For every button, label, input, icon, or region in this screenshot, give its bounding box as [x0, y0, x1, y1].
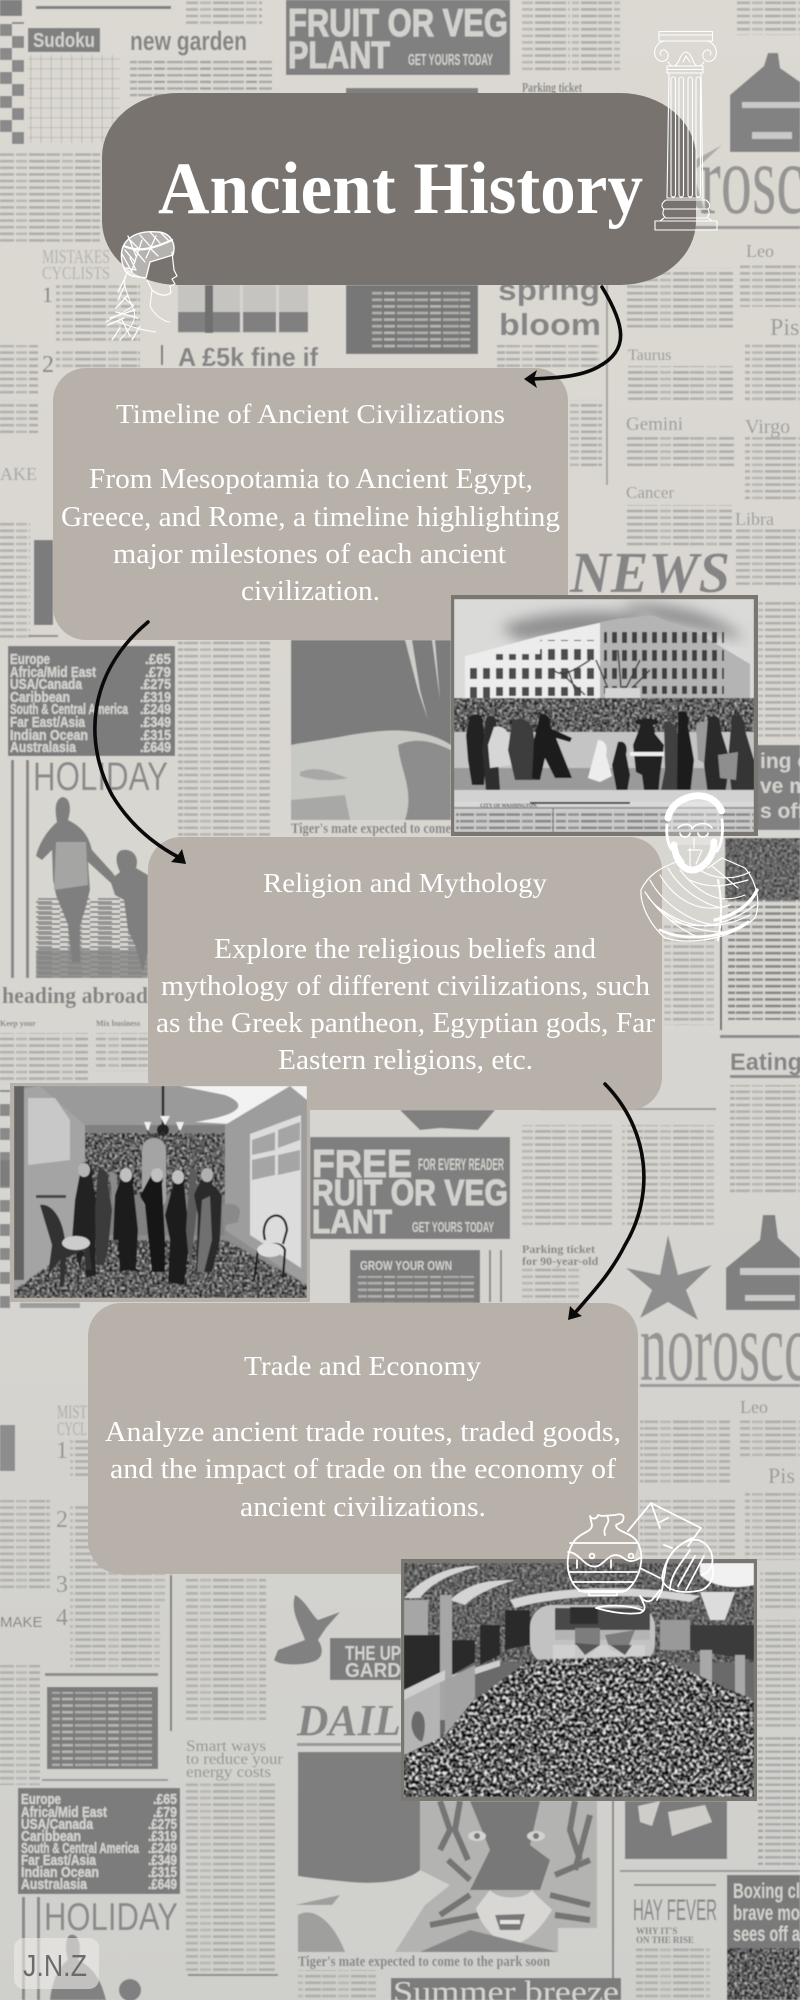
icon: laurel statue head	[106, 232, 177, 340]
rates table two: Indian Ocean	[21, 1865, 99, 1881]
rates table two: Europe	[21, 1792, 61, 1808]
rates table: .£275	[140, 677, 171, 693]
religion body text: as the Greek pantheon, Egyptian gods, Far	[156, 1007, 655, 1039]
rates table two: .£249	[148, 1841, 177, 1857]
rates table two: Caribbean	[21, 1829, 81, 1845]
tiger clipping two	[295, 1752, 621, 2000]
icon: amphora and scroll	[568, 1503, 713, 1614]
rates table: .£79	[145, 665, 171, 681]
rates table two: Far East/Asia	[21, 1853, 97, 1869]
panel: religion	[148, 837, 662, 1110]
upper left and middle clippings: spring	[498, 274, 600, 307]
lower left clippings: MAKE	[0, 1614, 43, 1631]
trade body text: Analyze ancient trade routes, traded goods,	[105, 1416, 621, 1448]
holiday clipping: HOLIDAY	[33, 755, 168, 799]
upper left and middle clippings: bloom	[499, 307, 601, 342]
rates table two: .£79	[153, 1805, 177, 1821]
free fruit or veg clipping: Parking ticket	[522, 1242, 595, 1256]
rates table: Australasia	[10, 740, 77, 756]
rates table: .£349	[140, 715, 171, 731]
lower left clippings: MIST	[57, 1402, 87, 1423]
tiger clipping two: Tiger's mate expected to come to the park soon	[298, 1954, 551, 1970]
upper left and middle clippings: 2	[42, 352, 54, 378]
lower left clippings: 1	[56, 1438, 68, 1464]
lower right horoscope: WHY IT'S	[636, 1926, 677, 1936]
title: Ancient History	[158, 148, 643, 230]
heading abroad clipping	[0, 983, 148, 1310]
free fruit or veg clipping	[310, 1108, 716, 1303]
tiger clipping one: Tiger's mate expected to come	[291, 821, 451, 837]
rates table two: USA/Canada	[21, 1817, 94, 1833]
top clippings: Parking ticket	[522, 81, 582, 96]
lower left clippings: THE UP	[345, 1643, 401, 1665]
holiday clipping	[11, 640, 270, 978]
timeline body text: civilization.	[241, 575, 380, 607]
lower right horoscope: ON THE RISE	[636, 1935, 694, 1945]
heading abroad clipping: Keep your	[0, 1019, 36, 1028]
rates table: USA/Canada	[10, 677, 83, 693]
rates table two: .£349	[148, 1853, 177, 1869]
rates table two: .£319	[148, 1829, 177, 1845]
rates table: .£319	[140, 690, 171, 706]
trade heading: Trade and Economy	[244, 1351, 482, 1381]
religion body text: Eastern religions, etc.	[278, 1044, 533, 1076]
arrow: timeline to religion	[95, 622, 186, 864]
icon: philosopher bust	[641, 796, 758, 941]
tray seller	[633, 722, 664, 797]
lower left clippings: CYCL	[57, 1419, 87, 1440]
upper left and middle clippings: MISTAKES	[42, 246, 110, 268]
photo: street crowd engraving: CITY OF WASHINGTON.	[480, 804, 538, 809]
right horoscope column: Gemini	[626, 414, 683, 435]
free fruit or veg clipping: RUIT OR VEG	[312, 1172, 508, 1213]
lower left clippings	[0, 1402, 401, 1975]
upper left and middle clippings	[0, 88, 800, 485]
top clippings	[0, 0, 800, 144]
free fruit or veg clipping: FREE	[312, 1143, 412, 1186]
trade body text: ancient civilizations.	[240, 1491, 486, 1523]
rates table: Far East/Asia	[10, 715, 86, 731]
photo: interior room engraving	[10, 1083, 310, 1302]
right horoscope column	[0, 400, 800, 1195]
free fruit or veg clipping: FOR EVERY READER	[418, 1155, 504, 1174]
eight standing men	[72, 1162, 98, 1278]
religion body text: mythology of different civilizations, such	[161, 970, 650, 1002]
trade body text	[105, 1416, 621, 1523]
lower left clippings: 2	[56, 1507, 68, 1533]
heading abroad clipping: heading abroad	[2, 983, 148, 1008]
rates table two: South & Central America	[21, 1841, 140, 1857]
star and house illustration	[646, 53, 800, 235]
rates table two: Africa/Mid East	[21, 1805, 107, 1821]
upper left and middle clippings: CYCLISTS	[42, 263, 110, 283]
timeline heading: Timeline of Ancient Civilizations	[116, 399, 505, 429]
rates table: Europe	[10, 652, 50, 668]
top clippings: FRUIT OR VEG	[288, 2, 508, 45]
rates table	[8, 646, 175, 756]
panel: trade	[88, 1303, 638, 1574]
lower right horoscope: Pis	[768, 1463, 795, 1488]
upper left and middle clippings: 1	[42, 282, 53, 307]
chairs	[40, 1205, 92, 1285]
timeline body text	[61, 463, 560, 607]
right group	[660, 720, 679, 790]
panel: timeline	[53, 368, 568, 640]
trade body text: and the impact of trade on the economy of	[110, 1453, 616, 1485]
free fruit or veg clipping: GROW YOUR OWN	[360, 1258, 452, 1273]
free fruit or veg clipping: GET YOURS TODAY	[412, 1219, 494, 1236]
rates table: Caribbean	[10, 690, 70, 706]
arrow: religion to trade	[568, 1084, 644, 1320]
upper left and middle clippings: A £5k fine if	[178, 342, 318, 372]
rates table two: .£315	[148, 1865, 177, 1881]
lower left clippings: 4	[56, 1605, 68, 1631]
timeline body text: Greece, and Rome, a timeline highlighting	[61, 501, 560, 533]
rates table: Indian Ocean	[10, 728, 88, 744]
right horoscope column: Libra	[735, 509, 774, 529]
religion body text	[156, 933, 655, 1076]
rates table two: .£649	[148, 1877, 177, 1893]
tiger clipping one	[291, 640, 451, 837]
rates table two: .£275	[148, 1817, 177, 1833]
free fruit or veg clipping: for 90-year-old	[522, 1254, 599, 1268]
second star, house and horoscope	[626, 1215, 800, 1402]
icon: ionic column	[655, 32, 717, 230]
right horoscope column: AKE	[0, 464, 37, 484]
right horoscope column: Cancer	[626, 483, 674, 502]
right horoscope column: Virgo	[745, 416, 790, 438]
free fruit or veg clipping: LANT	[312, 1203, 392, 1240]
upper left and middle clippings: Pis	[770, 315, 799, 341]
rates table: Africa/Mid East	[10, 665, 96, 681]
photo: ballroom crowd	[401, 1559, 757, 1801]
rates table two	[18, 1788, 376, 2000]
rates table two: .£65	[153, 1792, 177, 1808]
lower left clippings: to reduce your	[186, 1751, 284, 1768]
religion body text: Explore the religious beliefs and	[214, 933, 597, 965]
lower left clippings: 3	[56, 1572, 68, 1598]
upper left and middle clippings: Leo	[746, 241, 774, 261]
watermark: J.N.Z	[23, 1948, 87, 1983]
rates table two: HOLIDAY	[44, 1896, 178, 1939]
lower right horoscope: HAY FEVER	[633, 1894, 717, 1927]
rates table two: Australasia	[21, 1877, 88, 1893]
top clippings: PLANT	[288, 35, 390, 77]
heading abroad clipping: Mix business	[96, 1019, 140, 1028]
lower left clippings: DAIL	[296, 1696, 401, 1745]
rates table: .£315	[140, 728, 171, 744]
lower left clippings: GARD	[345, 1660, 401, 1682]
rates table: South & Central America	[10, 702, 129, 718]
right horoscope column: NEWS	[569, 540, 730, 605]
timeline body text: major milestones of each ancient	[113, 538, 506, 570]
watermark	[14, 1938, 99, 1989]
lower left clippings: energy costs	[186, 1764, 271, 1781]
left group of men	[466, 714, 486, 785]
timeline body text: From Mesopotamia to Ancient Egypt,	[89, 463, 533, 495]
religion heading: Religion and Mythology	[263, 868, 548, 898]
rates table: .£65	[145, 652, 171, 668]
top clippings: GET YOURS TODAY	[408, 52, 493, 69]
lower left clippings: Smart ways	[186, 1738, 266, 1755]
lower right horoscope	[612, 1397, 800, 2000]
rates table: .£249	[140, 702, 171, 718]
arrow: title to timeline	[524, 287, 621, 388]
rates table: .£649	[140, 740, 171, 756]
top clippings: new garden	[130, 26, 247, 56]
upper left and middle clippings: Taurus	[628, 347, 671, 364]
children	[588, 740, 612, 782]
title banner	[102, 93, 696, 285]
photo: street crowd engraving	[451, 595, 758, 836]
lower right horoscope: Leo	[740, 1397, 768, 1417]
top clippings: Sudoku	[33, 30, 95, 52]
